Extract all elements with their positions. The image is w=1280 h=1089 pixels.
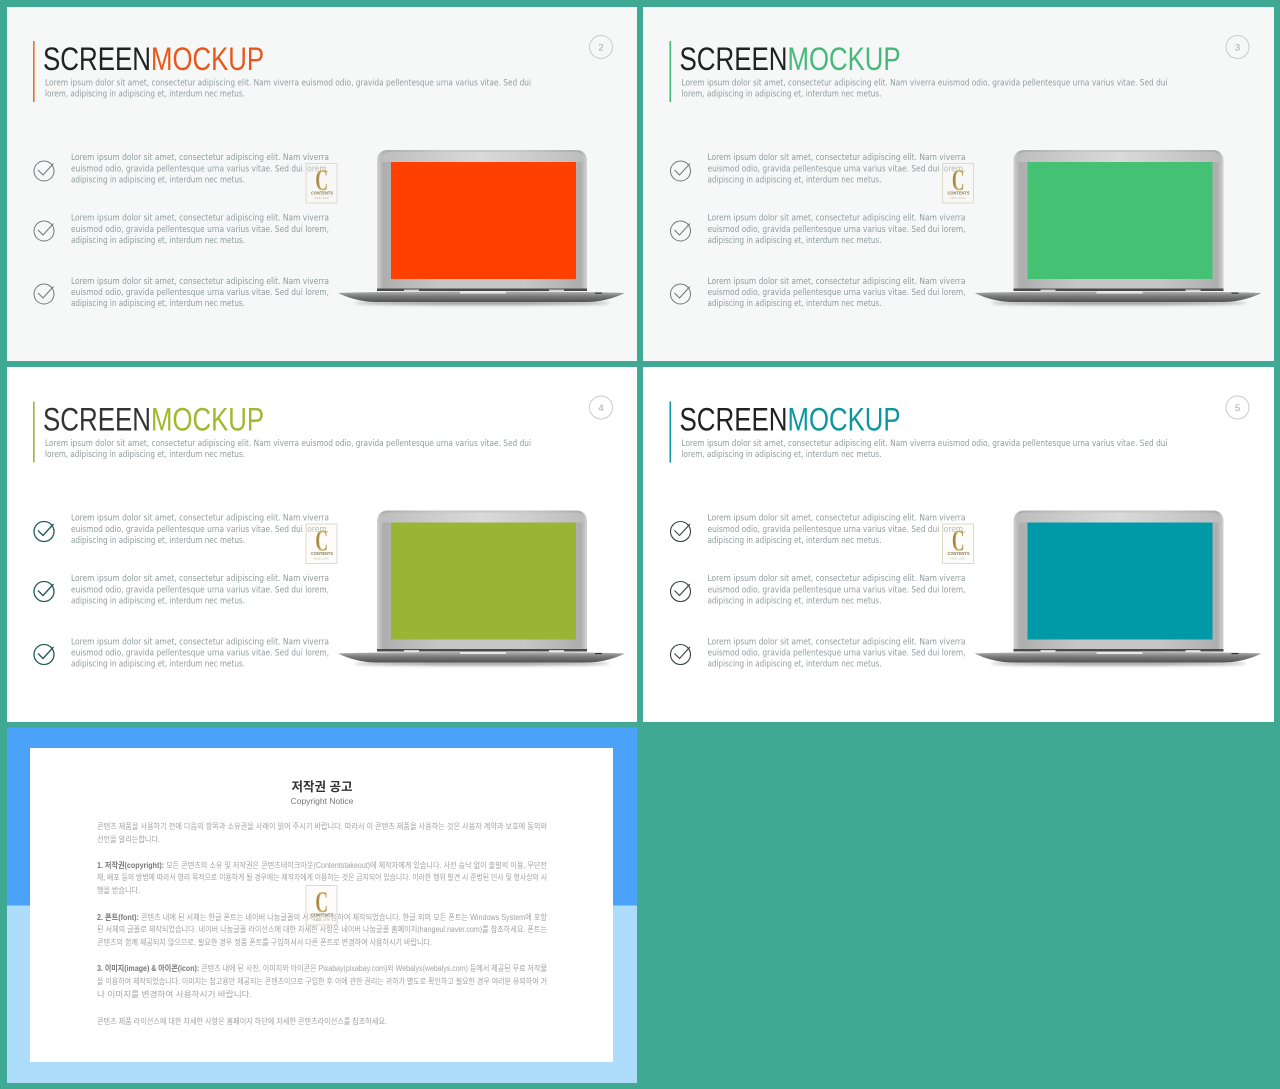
watermark logo: NICE LOOK	[950, 196, 966, 200]
watermark logo	[306, 522, 337, 564]
watermark logo: NICE LOOK	[314, 918, 329, 922]
text block 2: adipiscing in adipiscing et, interdum nec metus.	[71, 235, 245, 245]
text block 3: Lorem ipsum dolor sit amet, consectetur adipiscing elit. Nam viverra	[708, 636, 966, 646]
subtitle text	[45, 438, 531, 459]
accent bar	[670, 41, 671, 102]
text block 3: Lorem ipsum dolor sit amet, consectetur adipiscing elit. Nam viverra	[71, 636, 329, 646]
text block 3	[708, 636, 966, 668]
text block 2	[708, 573, 966, 606]
text block 2: Lorem ipsum dolor sit amet, consectetur adipiscing elit. Nam viverra	[708, 573, 966, 583]
laptop	[338, 150, 625, 305]
text block 3: adipiscing in adipiscing et, interdum nec metus.	[708, 298, 882, 308]
notice item 1: 행을 받습니다.	[97, 885, 140, 895]
text block 1	[71, 152, 329, 184]
watermark logo	[306, 162, 337, 203]
icon: check 3	[670, 284, 690, 304]
panel: slide 3 green	[643, 7, 1274, 361]
watermark logo: C	[952, 522, 964, 558]
text block 3: Lorem ipsum dolor sit amet, consectetur adipiscing elit. Nam viverra	[708, 276, 966, 286]
subtitle text: Lorem ipsum dolor sit amet, consectetur adipiscing elit. Nam viverra euismod odio, gravida pellentesque urna varius vitae. Sed dui	[682, 78, 1168, 88]
laptop	[974, 510, 1262, 666]
icon: check 3	[670, 644, 690, 664]
text block 1: euismod odio, gravida pellentesque urna varius vitae. Sed dui lorem,	[708, 164, 966, 174]
icon: check 1	[34, 522, 54, 542]
watermark logo	[942, 522, 974, 564]
text block 3	[71, 636, 329, 668]
subtitle text	[45, 78, 531, 98]
notice footer line: 콘텐츠 제품 라이선스에 대한 자세한 사항은 홈페이지 하단에 자세한 콘텐츠라이선스를 참조하세요.	[97, 1016, 387, 1026]
subtitle text: lorem, adipiscing in adipiscing et, interdum nec metus.	[682, 88, 882, 98]
text block 1: euismod odio, gravida pellentesque urna varius vitae. Sed dui lorem,	[708, 524, 966, 534]
laptop	[338, 510, 625, 666]
laptop	[974, 150, 1262, 305]
text block 1: Lorem ipsum dolor sit amet, consectetur adipiscing elit. Nam viverra	[71, 512, 329, 522]
page number	[1226, 36, 1249, 58]
page number	[1226, 396, 1249, 419]
text block 3	[708, 276, 966, 308]
icon: check 3	[34, 644, 54, 664]
notice card	[30, 748, 613, 1062]
subtitle text: lorem, adipiscing in adipiscing et, interdum nec metus.	[682, 449, 882, 459]
page number	[590, 396, 612, 419]
watermark logo: NICE LOOK	[950, 556, 966, 560]
text block 3: euismod odio, gravida pellentesque urna varius vitae. Sed dui lorem,	[708, 648, 966, 658]
watermark logo: NICE LOOK	[314, 196, 329, 200]
icon: check 2	[670, 582, 690, 602]
text block 3: adipiscing in adipiscing et, interdum nec metus.	[71, 298, 245, 308]
notice item 3: 3. 이미지(image) & 아이콘(icon): 콘텐츠 내에 된 사진, 이미지와 아이콘은 Pixabay(pixabay.com)와 Webalys(webalys.com) 등에서 제공된 무료 저작물	[97, 963, 547, 973]
text block 3	[71, 276, 329, 308]
icon: check 2	[670, 221, 690, 241]
page number: 3	[1235, 42, 1240, 54]
watermark logo: CONTENTS	[311, 190, 333, 196]
panel: slide 5 teal	[643, 367, 1274, 722]
text block 2: Lorem ipsum dolor sit amet, consectetur adipiscing elit. Nam viverra	[71, 573, 329, 583]
text block 2	[708, 212, 966, 245]
text block 1	[71, 512, 329, 545]
icon: check 2	[34, 221, 54, 241]
watermark logo: CONTENTS	[311, 551, 333, 556]
icon: check 1	[34, 161, 54, 181]
text block 2: euismod odio, gravida pellentesque urna varius vitae. Sed dui lorem,	[708, 224, 966, 234]
accent bar	[33, 402, 35, 462]
notice heading	[291, 779, 354, 806]
panel: copyright notice	[7, 728, 637, 1083]
text block 2: euismod odio, gravida pellentesque urna varius vitae. Sed dui lorem,	[708, 584, 966, 594]
watermark logo	[942, 162, 974, 203]
notice item 2	[97, 912, 548, 947]
subtitle text	[682, 78, 1168, 98]
notice item 2: 된 서체의 글꼴로 제작되었습니다. 네이버 나눔글꼴 라이선스에 대한 자세한 사항은 네이버 나눔글꼴 홈페이지(hangeul.naver.com)를 참조하세요. 폰트는	[97, 924, 547, 934]
title: SCREENMOCKUP	[43, 402, 264, 438]
watermark logo: CONTENTS	[311, 912, 333, 918]
notice intro: 선언을 알리는합니다.	[97, 834, 160, 844]
text block 1: Lorem ipsum dolor sit amet, consectetur adipiscing elit. Nam viverra	[71, 152, 329, 162]
title: SCREENMOCKUP	[680, 41, 900, 77]
notice item 2: 2. 폰트(font): 콘텐츠 내에 된 서체는 한글 폰트는 네이버 나눔글꼴의 서체를 사용하여 제작되었습니다. 한글 외의 모든 폰트는 Windows System에 포함	[97, 912, 548, 922]
text block 3: adipiscing in adipiscing et, interdum nec metus.	[71, 658, 245, 668]
notice intro	[97, 821, 548, 844]
text block 2: euismod odio, gravida pellentesque urna varius vitae. Sed dui lorem,	[71, 584, 329, 594]
watermark logo: NICE LOOK	[314, 556, 329, 560]
text block 3: Lorem ipsum dolor sit amet, consectetur adipiscing elit. Nam viverra	[71, 276, 329, 286]
watermark logo: CONTENTS	[948, 551, 970, 556]
watermark logo: C	[952, 162, 964, 197]
icon: check 3	[34, 284, 54, 304]
text block 3: adipiscing in adipiscing et, interdum nec metus.	[708, 658, 882, 668]
title: SCREENMOCKUP	[43, 41, 264, 77]
watermark logo: C	[316, 522, 328, 558]
accent bar	[670, 402, 671, 462]
text block 1: Lorem ipsum dolor sit amet, consectetur adipiscing elit. Nam viverra	[708, 512, 966, 522]
subtitle text: lorem, adipiscing in adipiscing et, interdum nec metus.	[45, 88, 245, 98]
subtitle text: Lorem ipsum dolor sit amet, consectetur adipiscing elit. Nam viverra euismod odio, gravida pellentesque urna varius vitae. Sed dui	[682, 438, 1168, 448]
text block 1	[708, 512, 966, 545]
watermark logo: CONTENTS	[948, 190, 970, 196]
text block 1: adipiscing in adipiscing et, interdum nec metus.	[708, 535, 882, 545]
notice item 1	[97, 860, 547, 895]
icon: check 1	[670, 522, 690, 542]
text block 2: adipiscing in adipiscing et, interdum nec metus.	[71, 596, 245, 606]
notice intro: 콘텐츠 제품을 사용하기 전에 다음의 항목과 소유권을 사례이 읽어 주시기 바랍니다. 따라서 이 콘텐츠 제품을 사용하는 것은 사용자 계약과 보호에 동의와	[97, 821, 548, 831]
page number	[590, 36, 612, 58]
text block 2: Lorem ipsum dolor sit amet, consectetur adipiscing elit. Nam viverra	[708, 212, 966, 222]
text block 1: adipiscing in adipiscing et, interdum nec metus.	[71, 174, 245, 184]
text block 3: euismod odio, gravida pellentesque urna varius vitae. Sed dui lorem,	[708, 287, 966, 297]
text block 1: adipiscing in adipiscing et, interdum nec metus.	[708, 174, 882, 184]
title: SCREENMOCKUP	[680, 402, 900, 438]
watermark logo: C	[316, 884, 328, 919]
page number: 5	[1235, 403, 1240, 414]
notice item 2: 콘텐츠의 함께 제공되지 않으므로, 필요한 경우 정품 폰트를 구입하셔서 다른 폰트로 변경하여 사용하시기 바랍니다.	[97, 937, 432, 947]
icon: check 1	[670, 161, 690, 181]
text block 1: Lorem ipsum dolor sit amet, consectetur adipiscing elit. Nam viverra	[708, 152, 966, 162]
notice item 3: 나 이미지를 변경하여 사용하시기 바랍니다.	[97, 989, 252, 999]
notice item 3: 을 이용하여 제작되었습니다. 이미지는 참고용만 제공되는 콘텐츠이므로 구입한 후 이에 관한 권리는 귀하가 별도로 확인하고 필요한 경우 여러분 유의하여 거	[97, 976, 547, 986]
text block 3: euismod odio, gravida pellentesque urna varius vitae. Sed dui lorem,	[71, 287, 329, 297]
text block 2	[71, 212, 329, 245]
notice heading: 저작권 공고	[292, 779, 352, 794]
notice item 1: 1. 저작권(copyright): 모든 콘텐츠의 소유 및 저작권은 콘텐츠테이크아웃(Contentstakeout)에 제작자에게 있습니다. 사전 승낙 없이 출발적 이용, 무단전	[97, 860, 547, 870]
icon: check 2	[34, 582, 54, 602]
notice item 3	[97, 963, 547, 999]
text block 2: adipiscing in adipiscing et, interdum nec metus.	[708, 235, 882, 245]
text block 2: euismod odio, gravida pellentesque urna varius vitae. Sed dui lorem,	[71, 224, 329, 234]
notice heading: Copyright Notice	[291, 796, 354, 806]
watermark logo: C	[316, 162, 328, 197]
text block 1: euismod odio, gravida pellentesque urna varius vitae. Sed dui lorem,	[71, 524, 329, 534]
text block 3: euismod odio, gravida pellentesque urna varius vitae. Sed dui lorem,	[71, 648, 329, 658]
panel: slide 4 olive	[7, 367, 637, 722]
text block 1	[708, 152, 966, 184]
text block 1: adipiscing in adipiscing et, interdum nec metus.	[71, 535, 245, 545]
subtitle text	[682, 438, 1168, 459]
watermark logo	[306, 884, 337, 925]
text block 2	[71, 573, 329, 606]
notice item 1: 재, 배포 등의 방법에 따라서 영리 목적으로 이용하게 될 경우에는 제작자에게 이용하는 것은 금지되어 있습니다. 이러한 행위 발견 시 준법된 민사 및 형사상의 시	[97, 872, 547, 882]
text block 1: euismod odio, gravida pellentesque urna varius vitae. Sed dui lorem,	[71, 164, 329, 174]
subtitle text: Lorem ipsum dolor sit amet, consectetur adipiscing elit. Nam viverra euismod odio, gravida pellentesque urna varius vitae. Sed dui	[45, 438, 531, 448]
subtitle text: lorem, adipiscing in adipiscing et, interdum nec metus.	[45, 449, 245, 459]
accent bar	[33, 41, 35, 102]
page number: 4	[598, 403, 604, 414]
text block 2: Lorem ipsum dolor sit amet, consectetur adipiscing elit. Nam viverra	[71, 212, 329, 222]
panel: slide 2 orange	[7, 7, 637, 361]
text block 2: adipiscing in adipiscing et, interdum nec metus.	[708, 596, 882, 606]
page number: 2	[598, 42, 604, 54]
subtitle text: Lorem ipsum dolor sit amet, consectetur adipiscing elit. Nam viverra euismod odio, gravida pellentesque urna varius vitae. Sed dui	[45, 78, 531, 88]
